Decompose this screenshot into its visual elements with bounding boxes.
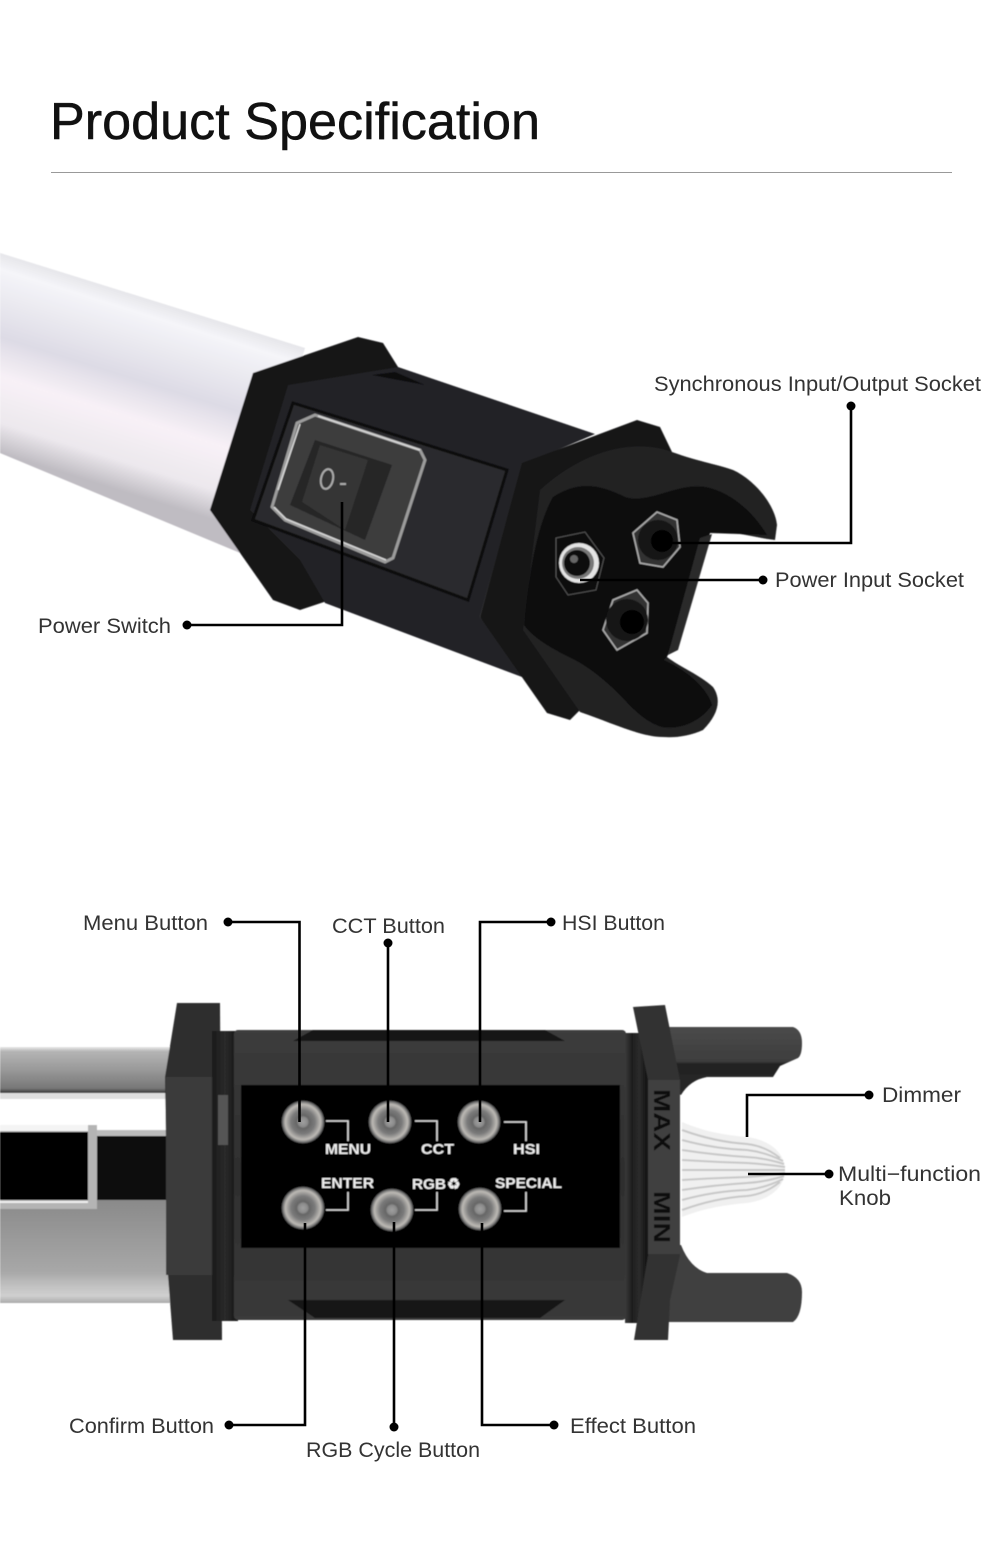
callout: power switch: Power Switch [38, 615, 171, 638]
handle body [250, 367, 595, 680]
callout: synchronous socket [654, 373, 981, 543]
printed button ticks [326, 1121, 526, 1211]
printed labels: SPECIAL [495, 1175, 562, 1192]
printed labels: HSI [513, 1141, 540, 1158]
callout: power switch [38, 502, 342, 638]
callout: confirm button [69, 1223, 305, 1438]
callout: rgb cycle button [306, 1222, 480, 1462]
end cap with prongs [523, 446, 777, 737]
max min engraved: MIN [649, 1191, 675, 1243]
button: special [458, 1188, 502, 1230]
power input socket [556, 532, 604, 595]
neck [212, 1031, 238, 1321]
button: menu [282, 1100, 324, 1144]
callout: power input socket: Power Input Socket [775, 569, 964, 592]
grip slots [293, 1030, 565, 1041]
printed labels: ENTER [321, 1175, 374, 1192]
callout: hsi button: HSI Button [562, 912, 665, 935]
upper prong [662, 1027, 802, 1095]
callout: effect button: Effect Button [570, 1415, 696, 1438]
sync socket [633, 512, 680, 567]
callout: cct button: CCT Button [332, 915, 445, 938]
front ring [625, 1033, 649, 1323]
callout: multi-function knob [748, 1163, 981, 1210]
power switch [272, 415, 425, 562]
printed labels [321, 1141, 562, 1193]
callout: confirm button: Confirm Button [69, 1415, 214, 1438]
callout: menu button [83, 912, 300, 1122]
left collar [165, 1003, 222, 1340]
callout: multi-function knob: Multi−function [838, 1163, 981, 1186]
title: Product Specification [50, 93, 540, 151]
printed labels: CCT [421, 1141, 454, 1158]
max min engraved: MAX [649, 1089, 675, 1152]
light tube [0, 253, 305, 555]
knob [682, 1122, 785, 1217]
right collar [633, 1005, 680, 1340]
sync socket lower [603, 590, 648, 650]
control panel [241, 1085, 620, 1248]
tube [0, 1047, 170, 1303]
callout: synchronous socket: Synchronous Input/Output Socket [654, 373, 981, 396]
rear collar [210, 337, 398, 610]
product photo: top angled tube light [0, 253, 777, 737]
callout: dimmer [747, 1084, 961, 1137]
callout: multi-function knob: Knob [839, 1187, 891, 1210]
lower prong [662, 1245, 802, 1322]
button: rgb [370, 1188, 414, 1232]
callout: dimmer: Dimmer [882, 1084, 961, 1107]
header rule [51, 172, 952, 173]
callout: hsi button [480, 912, 665, 1122]
handle body [234, 1030, 626, 1320]
callout: menu button: Menu Button [83, 912, 208, 935]
button: cct [368, 1100, 412, 1144]
max min engraved [649, 1089, 675, 1243]
printed labels: RGB [412, 1176, 446, 1193]
switch panel [253, 403, 507, 600]
button: enter [282, 1186, 324, 1230]
inner rim of prong [668, 534, 712, 655]
callout: power input socket [580, 569, 964, 592]
callout: cct button [332, 915, 445, 1122]
button: hsi [458, 1100, 500, 1144]
printed labels: ♻ [447, 1176, 460, 1193]
callout: rgb cycle button: RGB Cycle Button [306, 1439, 480, 1462]
front collar [480, 420, 672, 720]
printed labels: MENU [325, 1141, 371, 1158]
callout: effect button [482, 1223, 696, 1438]
product photo: front view of control panel [0, 1003, 802, 1340]
socket face [524, 486, 767, 728]
